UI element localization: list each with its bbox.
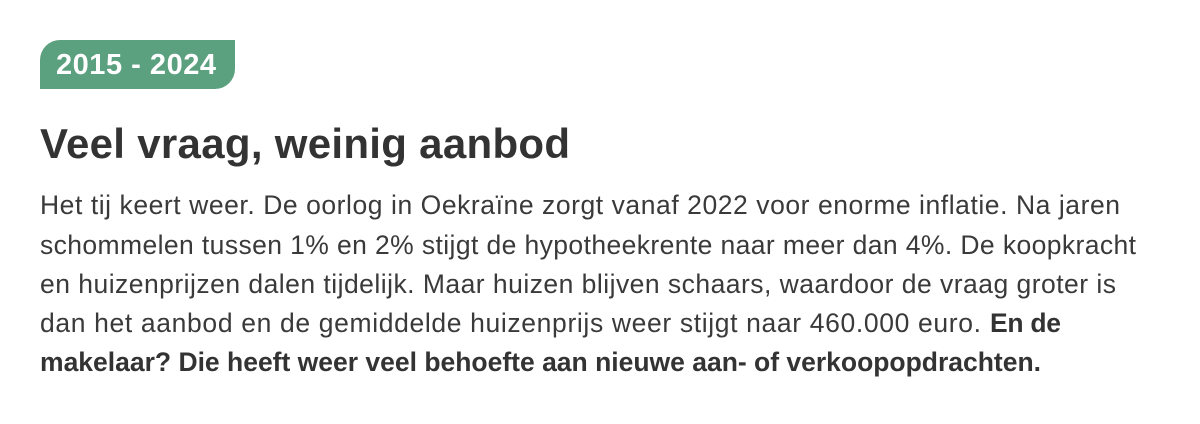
body paragraph: makelaar? Die heeft weer veel behoefte aan nieuwe aan- of verkoopopdrachten. <box>40 347 1041 377</box>
body paragraph: schommelen tussen 1% en 2% stijgt de hypotheekrente naar meer dan 4%. De koopkracht <box>40 230 1137 260</box>
body paragraph: en huizenprijzen dalen tijdelijk. Maar huizen blijven schaars, waardoor de vraag groter is <box>40 269 1116 299</box>
body paragraph: dan het aanbod en de gemiddelde huizenprijs weer stijgt naar 460.000 euro. <box>40 308 981 338</box>
body paragraph: Het tij keert weer. De oorlog in Oekraïne zorgt vanaf 2022 voor enorme inflatie. Na jaren <box>40 190 1120 220</box>
body paragraph <box>40 190 1137 377</box>
period badge: 2015 - 2024 <box>56 49 216 81</box>
title: Veel vraag, weinig aanbod <box>40 120 570 167</box>
period badge <box>40 40 235 89</box>
body paragraph: En de <box>990 308 1061 338</box>
